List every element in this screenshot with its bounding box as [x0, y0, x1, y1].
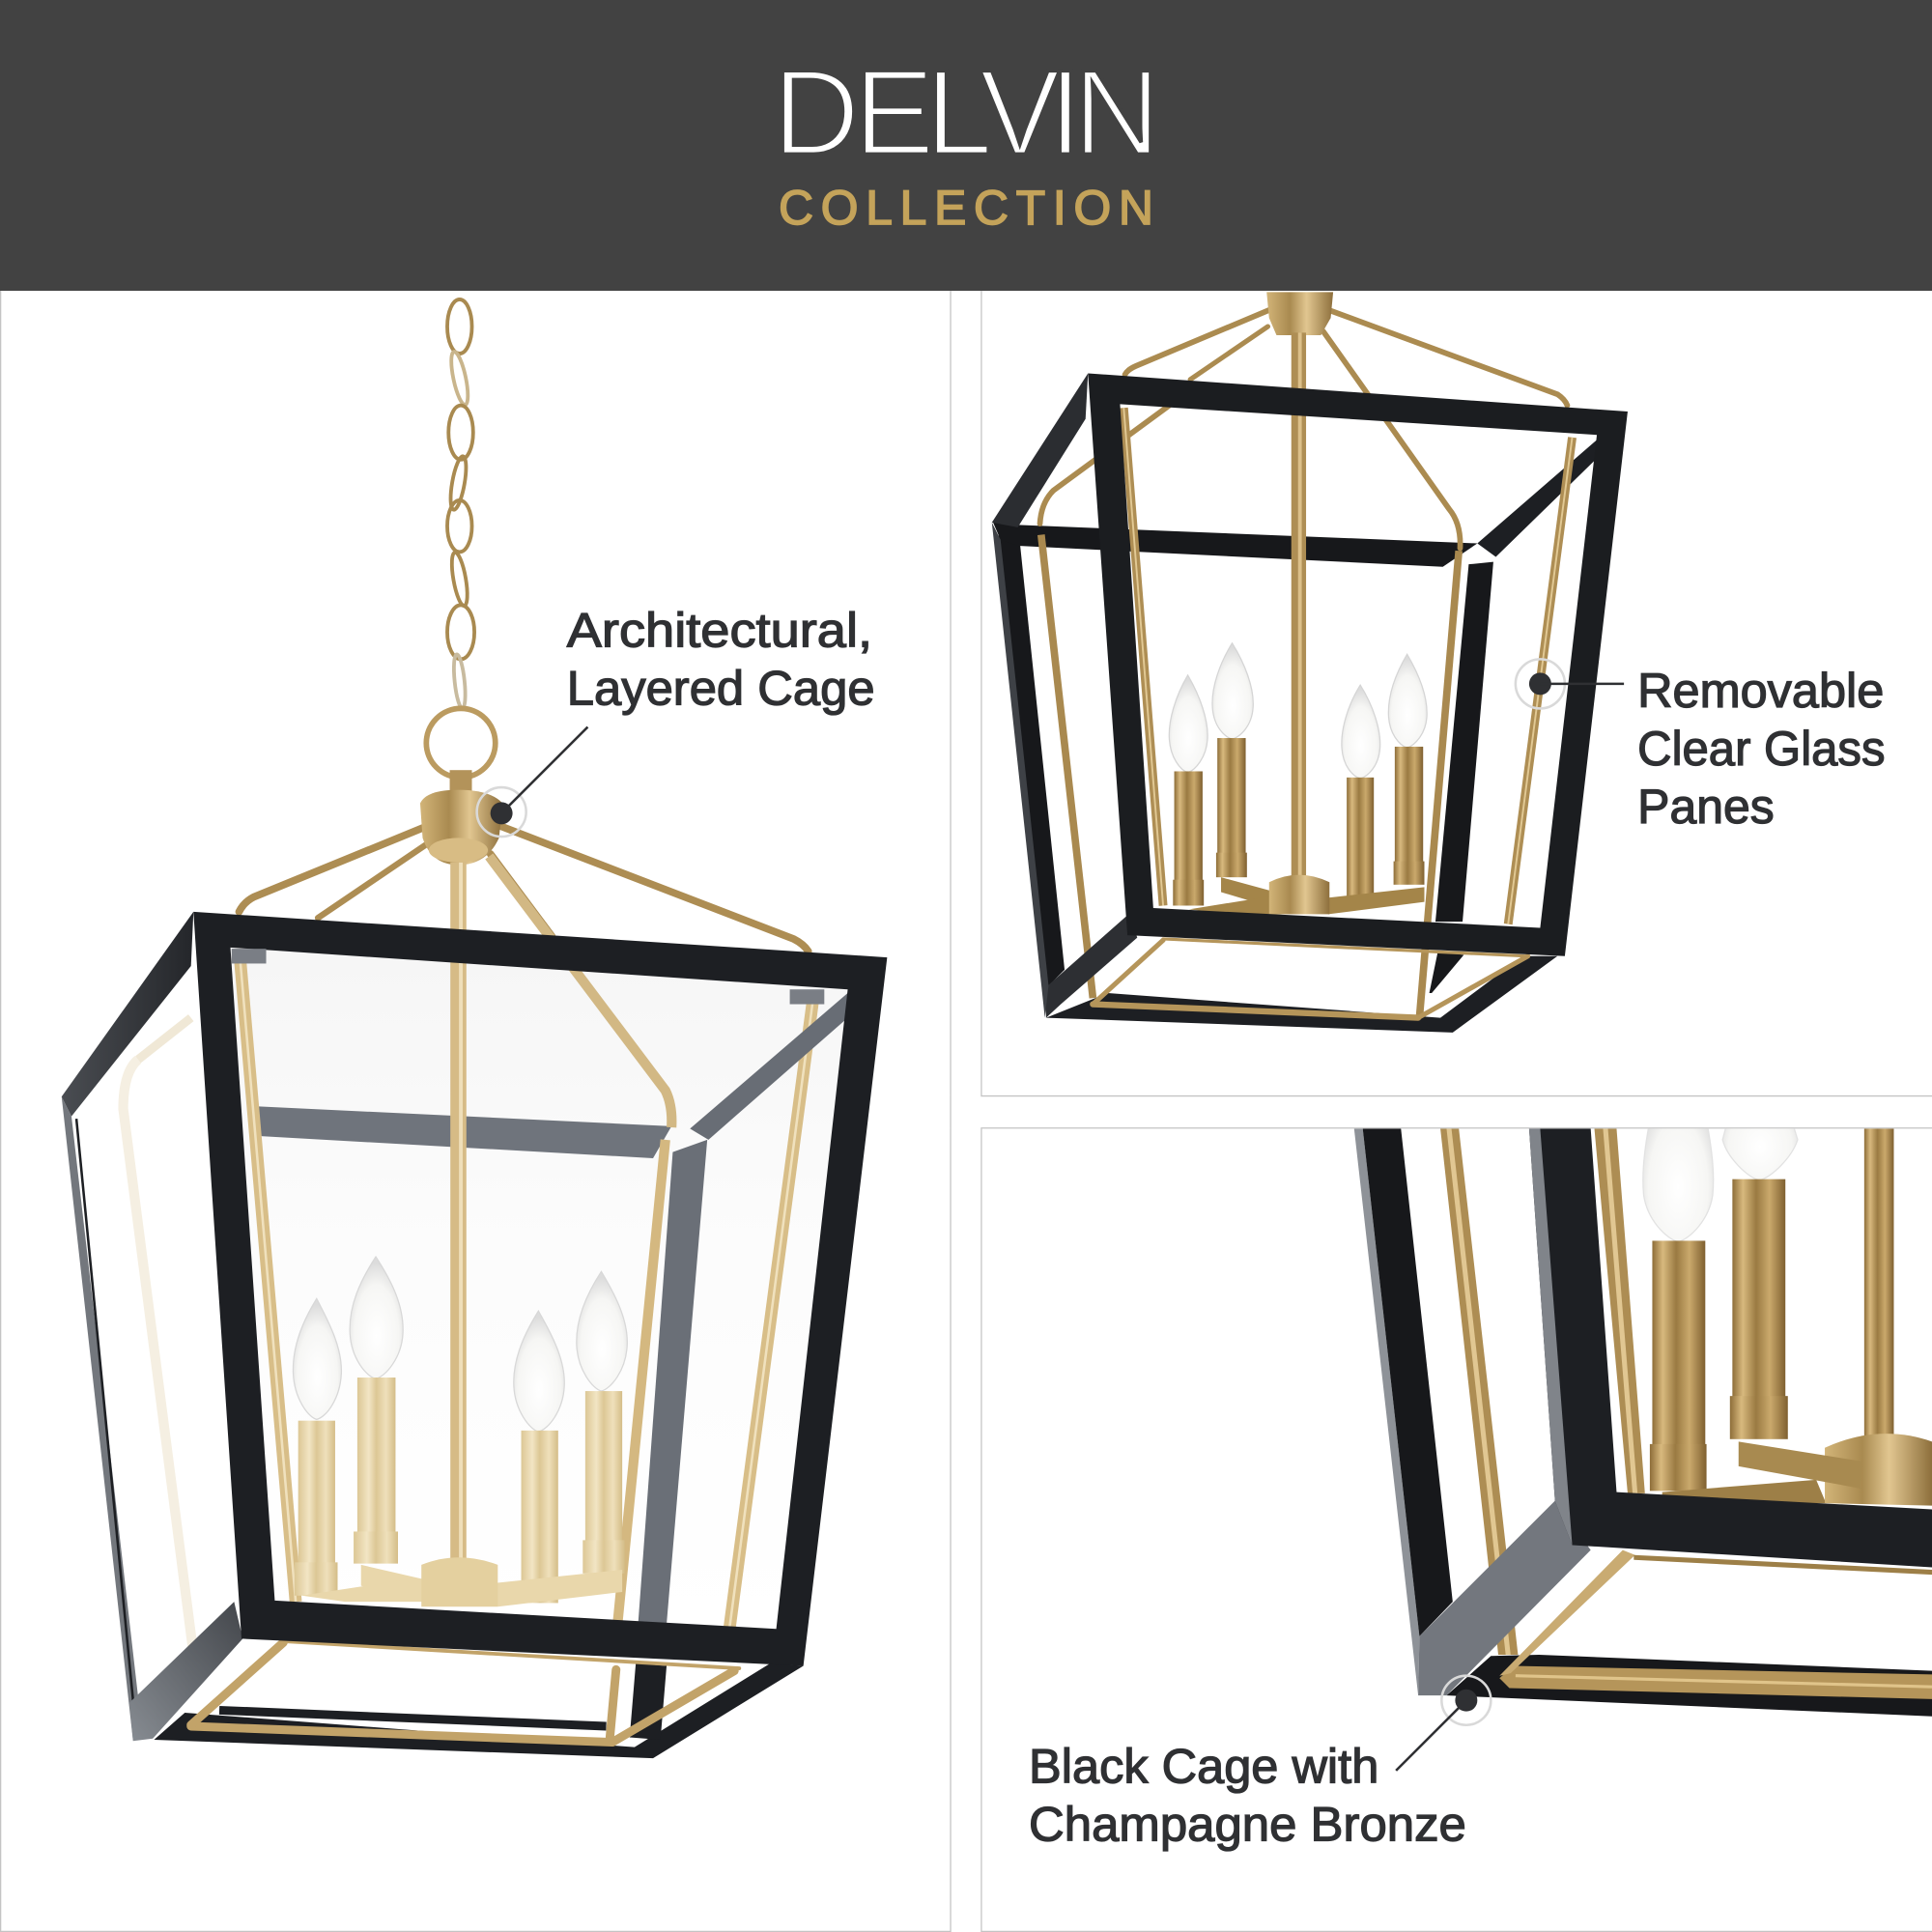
hub: [420, 770, 502, 865]
bulbs: [1642, 1128, 1799, 1240]
panel: top right lantern: [992, 292, 1628, 1033]
front frame bar: [1529, 1128, 1932, 1567]
back side of cage: [993, 440, 1597, 993]
subtitle: COLLECTION: COLLECTION: [779, 181, 1153, 235]
candles: [1173, 738, 1424, 907]
callout text: Black Cage with: [1029, 1740, 1378, 1794]
top clips: [232, 949, 824, 1005]
candle 1: [1650, 1240, 1707, 1491]
callout: architectural layered cage: [477, 604, 875, 837]
central rod: [1864, 1128, 1893, 1443]
bulbs: [293, 1257, 627, 1432]
hub: [1266, 292, 1333, 335]
front frame: [193, 912, 887, 1665]
rods through glass: [124, 856, 671, 1663]
callout: black cage with champagne bronze: [1029, 1676, 1491, 1852]
callout text: Panes: [1637, 780, 1775, 834]
panel: full lantern: [62, 299, 887, 1758]
candles: [295, 1378, 625, 1603]
bulbs: [1169, 643, 1427, 779]
front frame: [1088, 373, 1628, 956]
panel: bottom right detail: [1354, 1084, 1932, 1717]
bottom cage: [992, 373, 1557, 1033]
title: DELVIN: DELVIN: [773, 45, 1160, 180]
candle arms and base: [1662, 1434, 1932, 1506]
candle arms and base: [1189, 875, 1424, 914]
glass panes: [231, 948, 846, 997]
candle 2: [1730, 1179, 1788, 1439]
side rails: [62, 912, 848, 1741]
callout text: Clear Glass: [1637, 722, 1886, 776]
cage arms: [239, 819, 809, 952]
callout text: Architectural,: [567, 604, 872, 658]
candle arms and base: [301, 1557, 622, 1606]
callout text: Champagne Bronze: [1029, 1798, 1466, 1852]
gold rods: [1440, 1128, 1645, 1655]
bottom cage: [129, 1602, 804, 1758]
gold rods: [1041, 332, 1573, 1018]
callout text: Removable: [1637, 664, 1884, 718]
bottom rails: [1418, 1501, 1932, 1717]
back right post: [637, 1140, 707, 1638]
callout: removable clear glass panes: [1516, 659, 1886, 834]
header band: [0, 0, 1932, 291]
rear post: [1354, 1128, 1453, 1695]
chain: [447, 299, 474, 709]
callout text: Layered Cage: [567, 662, 875, 716]
gold arms: [1040, 304, 1567, 549]
back rail through glass: [259, 1106, 671, 1158]
hanging ring: [426, 708, 496, 778]
side frame rods: [241, 961, 813, 1638]
